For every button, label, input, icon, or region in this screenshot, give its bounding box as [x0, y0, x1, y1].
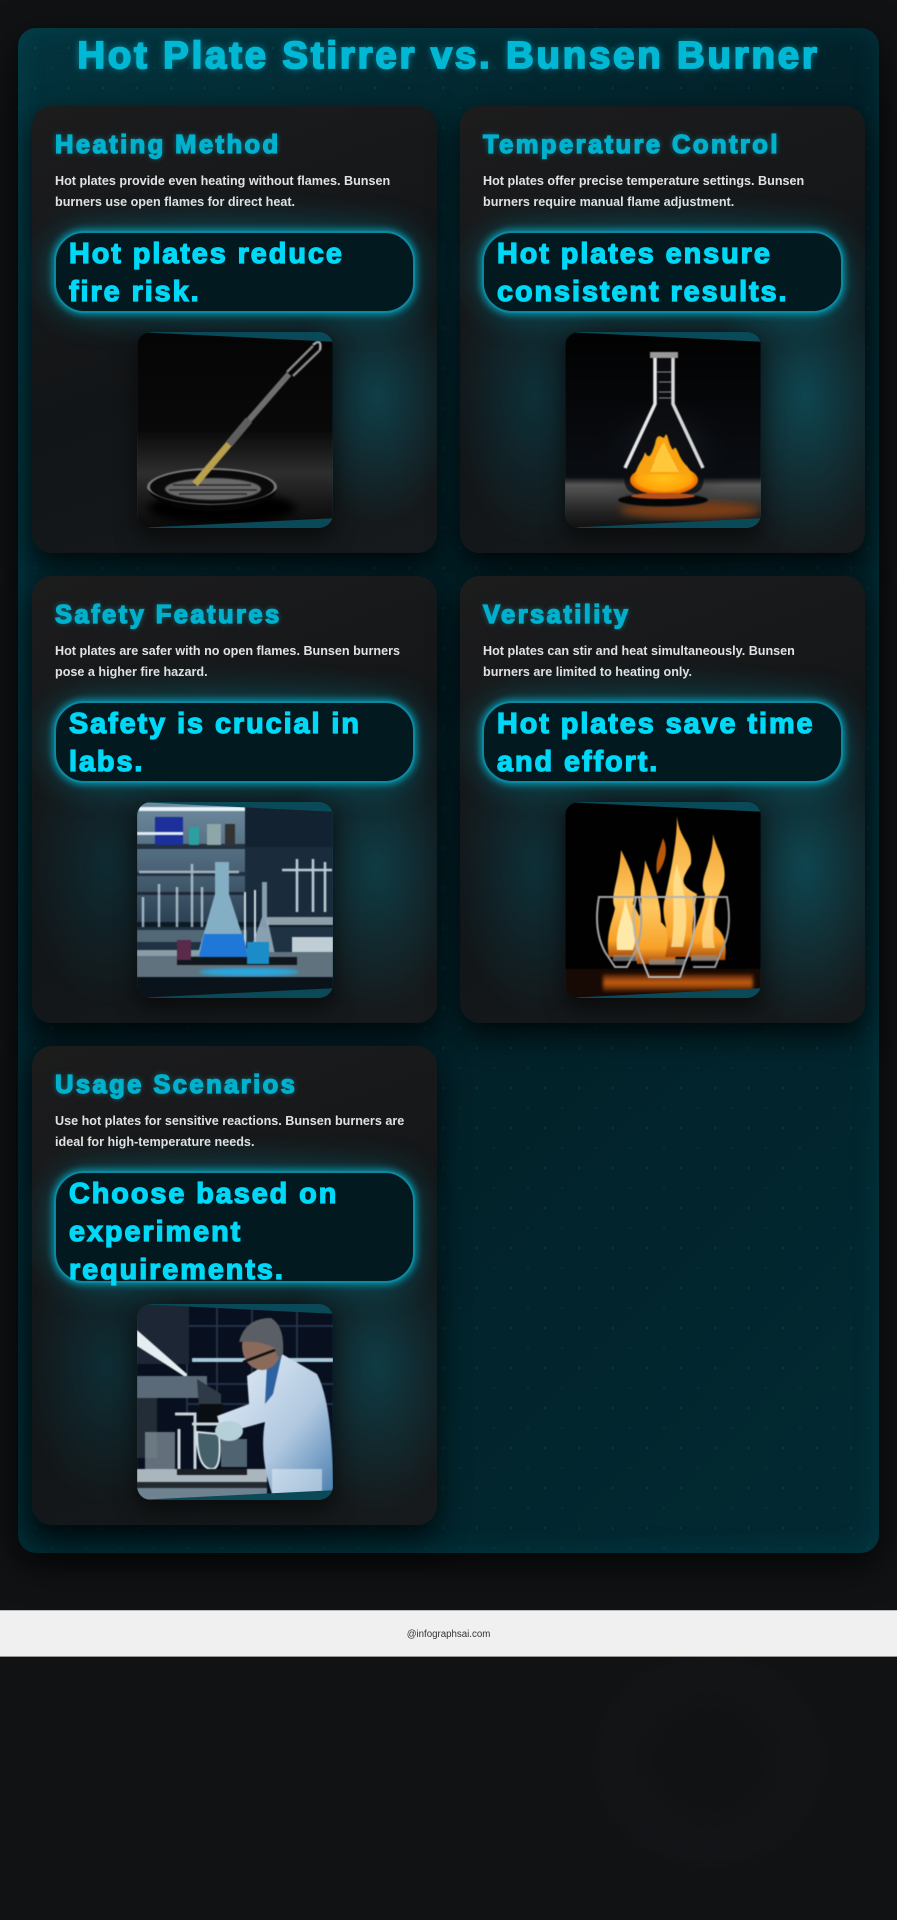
image: flames in glasses — [565, 802, 761, 998]
image: stirring rod in dish — [137, 332, 333, 528]
panel: temperature control — [460, 106, 865, 553]
panel: versatility — [460, 576, 865, 1023]
heading: Versatility — [483, 601, 630, 629]
panel: usage scenarios — [32, 1046, 437, 1525]
callout — [54, 701, 415, 783]
heading: Temperature Control — [483, 131, 780, 159]
callout: Choose based on experiment requirements. — [69, 1178, 338, 1286]
callout — [54, 1171, 415, 1283]
image: flask with flame — [565, 332, 761, 528]
text block: Hot plates provide even heating without flames. Bunsen burners use open flames for direct heat. — [55, 174, 390, 208]
footer — [0, 1610, 897, 1657]
text block: Hot plates are safer with no open flames. Bunsen burners pose a higher fire hazard. — [55, 644, 400, 678]
callout: Hot plates save time and effort. — [497, 708, 814, 778]
callout: Safety is crucial in labs. — [69, 708, 361, 778]
callout: Hot plates ensure consistent results. — [497, 238, 788, 308]
heading: Heating Method — [55, 131, 281, 159]
callout: Hot plates reduce fire risk. — [69, 238, 344, 308]
panel: main container — [18, 28, 879, 1553]
callout — [482, 231, 843, 313]
panel: heating method — [32, 106, 437, 553]
faint background blotch — [590, 1650, 830, 1870]
text block: Hot plates can stir and heat simultaneously. Bunsen burners are limited to heating only. — [483, 644, 795, 678]
text block: Use hot plates for sensitive reactions. Bunsen burners are ideal for high-temperature needs. — [55, 1114, 404, 1148]
callout — [54, 231, 415, 313]
heading: Usage Scenarios — [55, 1071, 297, 1099]
heading: Safety Features — [55, 601, 282, 629]
text block: Hot plates offer precise temperature settings. Bunsen burners require manual flame adjustment. — [483, 174, 804, 208]
image: scientist at microscope — [137, 1304, 333, 1500]
footer: @infographsai.com — [407, 1629, 490, 1640]
image: lab glassware — [137, 802, 333, 998]
title: Hot Plate Stirrer vs. Bunsen Burner — [77, 34, 820, 77]
panel: safety features — [32, 576, 437, 1023]
